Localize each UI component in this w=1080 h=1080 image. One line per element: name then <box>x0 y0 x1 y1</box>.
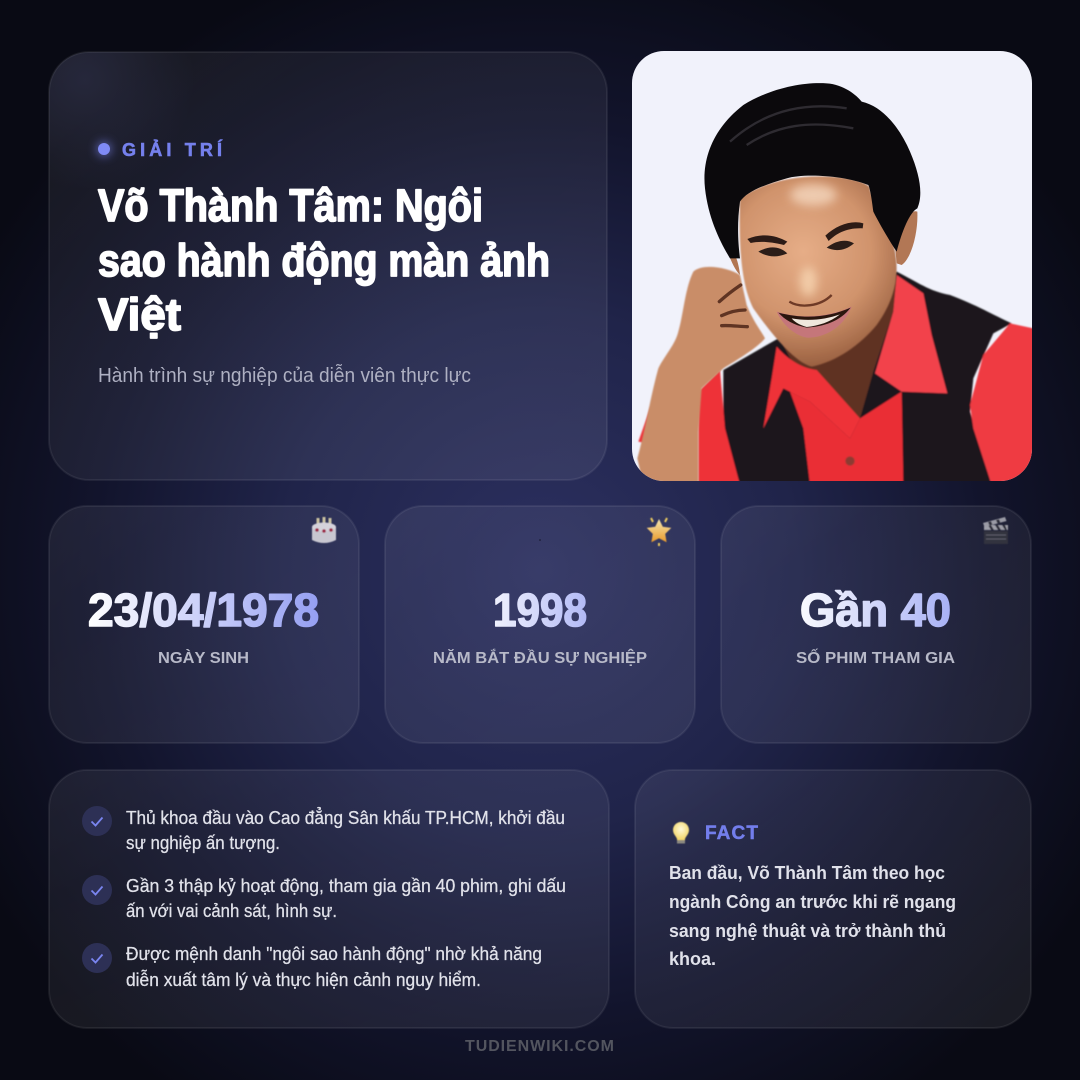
list item 1 <box>82 806 565 853</box>
stat label: SỐ PHIM THAM GIA <box>796 647 955 667</box>
stat value: 23/04/1978 <box>88 584 319 636</box>
stat label: NGÀY SINH <box>158 648 249 667</box>
list item 1: Thủ khoa đầu vào Cao đẳng Sân khấu TP.HCM, khởi đầu <box>126 807 565 828</box>
portrait: eyes <box>758 241 854 256</box>
stat label: NĂM BẮT ĐẦU SỰ NGHIỆP <box>433 648 647 667</box>
list item 3 <box>82 943 542 990</box>
stat card: film count <box>721 506 1031 743</box>
portrait: hair <box>704 83 920 258</box>
category tag: GIẢI TRÍ <box>122 139 223 160</box>
fact text: Ban đầu, Võ Thành Tâm theo học <box>669 863 945 883</box>
portrait: smile <box>777 307 852 338</box>
stat card: career start <box>385 506 695 743</box>
portrait: arm and hand <box>637 267 765 485</box>
panel: fact <box>635 770 1031 1028</box>
icon: cake <box>312 517 336 543</box>
list item 3: Được mệnh danh "ngôi sao hành động" nhờ khả năng <box>126 944 542 964</box>
stat card: birth date <box>49 506 359 743</box>
list item 3: diễn xuất tâm lý và thực hiện cảnh nguy hiểm. <box>126 969 481 990</box>
icon: light bulb <box>673 822 689 844</box>
portrait: nose <box>800 267 817 297</box>
fact heading: FACT <box>705 823 758 844</box>
title: sao hành động màn ảnh <box>98 235 550 286</box>
portrait: face <box>740 176 897 367</box>
portrait: right ear <box>895 211 917 265</box>
fact text: khoa. <box>669 949 716 969</box>
portrait: body <box>638 272 1033 485</box>
stat value: 1998 <box>493 584 587 636</box>
portrait: hair highlights <box>730 106 853 145</box>
panel: highlights list <box>49 770 609 1028</box>
portrait: fingers <box>719 285 747 327</box>
fact text: sang nghệ thuật và trở thành thủ <box>669 921 946 941</box>
fact text <box>669 863 956 969</box>
portrait photo <box>632 51 1033 485</box>
portrait: eyebrows <box>747 222 863 245</box>
title <box>98 180 550 340</box>
list item 2: ấn với vai cảnh sát, hình sự. <box>126 901 337 921</box>
list item 2 <box>82 875 566 921</box>
portrait: forehead highlight <box>790 184 837 206</box>
icon: star <box>647 518 671 546</box>
subtitle: Hành trình sự nghiệp của diễn viên thực lực <box>98 364 471 387</box>
stat value: Gần 40 <box>800 584 951 636</box>
title: Võ Thành Tâm: Ngôi <box>98 180 483 231</box>
list item 2: Gần 3 thập kỷ hoạt động, tham gia gần 40 phim, ghi dấu <box>126 876 566 896</box>
icon: clapperboard <box>983 517 1008 544</box>
panel: title card <box>49 52 607 480</box>
portrait: left ear <box>730 258 740 275</box>
title: Việt <box>98 289 181 340</box>
footer watermark: TUDIENWIKI.COM <box>465 1038 614 1055</box>
fact text: ngành Công an trước khi rẽ ngang <box>669 892 956 912</box>
list item 1: sự nghiệp ấn tượng. <box>126 833 280 853</box>
